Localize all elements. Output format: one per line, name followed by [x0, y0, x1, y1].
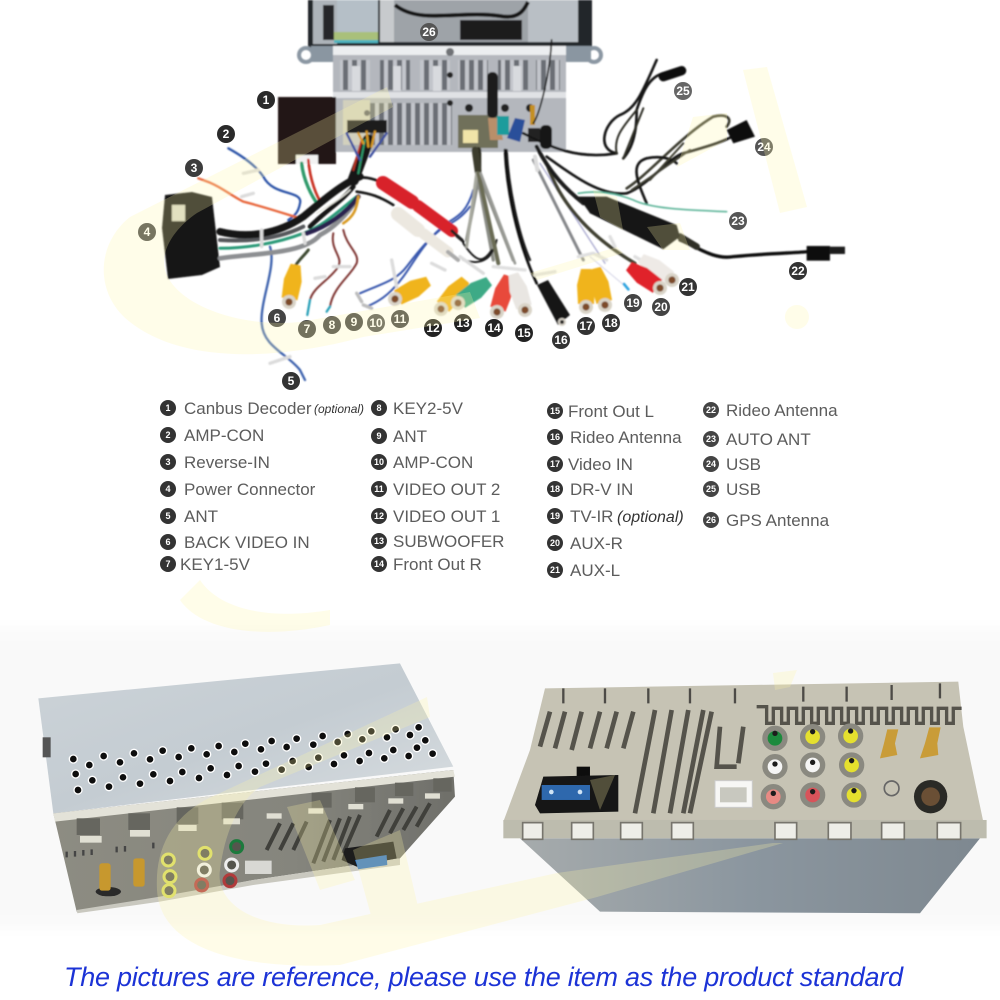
- item 19: TV-IR: [570, 507, 613, 526]
- photo: unit perspective view from above: [38, 663, 455, 913]
- callout 3: 3: [191, 161, 198, 175]
- item 12: 12: [374, 511, 384, 521]
- item 2: 2: [165, 430, 171, 440]
- RCA plug 21 white: [636, 251, 683, 291]
- top notches: [563, 683, 940, 703]
- connector blocks on chassis: [347, 72, 552, 149]
- item 21: 21: [550, 565, 560, 575]
- white multi-pin plug: [715, 781, 752, 807]
- item 11: 11: [374, 484, 384, 494]
- vent holes: [69, 723, 437, 794]
- item 10: 10: [374, 457, 384, 467]
- callout numbers on diagram: [138, 23, 807, 390]
- callout 23: [729, 212, 747, 230]
- item 9: [371, 427, 427, 446]
- callout 23: 23: [731, 214, 745, 228]
- callout 1: [257, 91, 275, 109]
- item 17: Video IN: [568, 455, 633, 474]
- panel tabs: [77, 778, 452, 835]
- callout 11: [391, 310, 409, 328]
- 3.5mm plug 16: [537, 280, 570, 326]
- underside: [520, 838, 980, 913]
- item 15: Front Out L: [568, 402, 654, 421]
- watermark lower letters: [180, 580, 797, 930]
- item 26: 26: [706, 515, 716, 525]
- item 14: Front Out R: [393, 555, 482, 574]
- item 3: 3: [165, 457, 171, 467]
- callout 10: 10: [369, 316, 383, 330]
- callout 2: 2: [223, 127, 230, 141]
- item 17: 17: [550, 459, 560, 469]
- item 1: (optional): [314, 402, 364, 416]
- item 18: DR-V IN: [570, 480, 633, 499]
- item 6: 6: [165, 537, 171, 547]
- item 24: [703, 455, 761, 474]
- callout 20: [652, 298, 670, 316]
- RCA plug 12 yellow: [430, 274, 472, 320]
- watermark upper C: [104, 87, 480, 354]
- item 3: Reverse-IN: [184, 453, 270, 472]
- small slots: [67, 843, 153, 857]
- callout 9: [345, 313, 363, 331]
- lower lip with tabs: [503, 820, 987, 838]
- callout 7: [298, 320, 316, 338]
- legend column 4: [703, 401, 838, 530]
- RCA plug 13 green: [447, 274, 494, 314]
- item 4: 4: [165, 484, 171, 494]
- photo: unit rear panel close up: [503, 682, 987, 913]
- right side bundles: [467, 40, 845, 289]
- item 22: Rideo Antenna: [726, 401, 838, 420]
- gold antenna sockets: [880, 727, 941, 758]
- callout 17: 17: [579, 319, 593, 333]
- left harness wires: [198, 132, 530, 380]
- legend: connector names: [160, 399, 838, 580]
- item 22: 22: [706, 405, 716, 415]
- callout 11: 11: [394, 312, 407, 326]
- multi-pin connector: [535, 767, 618, 813]
- callout 6: [268, 309, 286, 327]
- chassis: [333, 46, 566, 152]
- callout 26: [420, 23, 438, 41]
- rear plate: [503, 682, 983, 822]
- round socket: [884, 780, 947, 813]
- RCA plug 14 red: [486, 273, 517, 321]
- item 26: GPS Antenna: [726, 511, 830, 530]
- callout 14: [485, 319, 503, 337]
- callout 10: [367, 314, 385, 332]
- item 7: 7: [165, 559, 171, 569]
- legend column 1: [160, 399, 364, 574]
- item 10: AMP-CON: [393, 453, 473, 472]
- item 25: USB: [726, 480, 761, 499]
- item 20: 20: [550, 538, 560, 548]
- wire labels: [242, 170, 483, 363]
- callout 5: 5: [288, 374, 295, 388]
- item 16: 16: [550, 432, 560, 442]
- callout 8: [323, 316, 341, 334]
- rear panel: [53, 770, 455, 912]
- watermark: large translucent lettering: [104, 67, 809, 966]
- callout 15: 15: [517, 326, 531, 340]
- item 1: [160, 399, 364, 418]
- item 14: 14: [374, 559, 384, 569]
- RCA plug 15 white: [505, 271, 536, 319]
- panel highlights: [80, 793, 440, 843]
- item 18: 18: [550, 484, 560, 494]
- callout 24: 24: [757, 140, 771, 154]
- RCA plug 17 yellow: [577, 269, 595, 314]
- RCA plug 6 yellow: [279, 263, 304, 310]
- item 7: KEY1-5V: [180, 555, 251, 574]
- item 19: 19: [550, 511, 560, 521]
- power connector: [162, 192, 220, 279]
- callout 16: 16: [554, 333, 568, 347]
- item 11: VIDEO OUT 2: [393, 480, 500, 499]
- item 9: 9: [376, 431, 382, 441]
- callout 17: [577, 317, 595, 335]
- item 15: 15: [550, 406, 560, 416]
- top cover: [38, 663, 453, 813]
- callout 16: [552, 331, 570, 349]
- callout 14: 14: [487, 321, 501, 335]
- item 13: SUBWOOFER: [393, 532, 504, 551]
- item 23: 23: [706, 434, 716, 444]
- blue connector: [342, 842, 397, 867]
- watermark lower C: [157, 697, 783, 966]
- item 16: Rideo Antenna: [570, 428, 682, 447]
- item 5: ANT: [184, 507, 218, 526]
- RCA plug 20 red: [624, 259, 671, 299]
- legend column 2: [371, 399, 504, 574]
- callout 20: 20: [654, 300, 668, 314]
- item 24: 24: [706, 459, 716, 469]
- callout 8: 8: [329, 318, 336, 332]
- callout 3: [185, 159, 203, 177]
- item 9: ANT: [393, 427, 427, 446]
- callout 4: [138, 223, 156, 241]
- item 6: BACK VIDEO IN: [184, 533, 310, 552]
- callout 13: [454, 314, 472, 332]
- callout 26: 26: [422, 25, 436, 39]
- callout 12: [424, 319, 442, 337]
- item 23: AUTO ANT: [726, 430, 811, 449]
- item 13: 13: [374, 536, 384, 546]
- callout 13: 13: [456, 316, 470, 330]
- callout 6: 6: [274, 311, 281, 325]
- callout 4: 4: [144, 225, 151, 239]
- white plug: [245, 861, 272, 874]
- callout 21: [679, 278, 697, 296]
- callout 19: 19: [626, 296, 640, 310]
- panel lower lip: [77, 858, 400, 913]
- item 24: USB: [726, 455, 761, 474]
- callout 22: [789, 262, 807, 280]
- callout 18: 18: [604, 316, 618, 330]
- callout 21: 21: [681, 280, 695, 294]
- item 2: AMP-CON: [184, 426, 264, 445]
- callout 15: [515, 324, 533, 342]
- callout 1: 1: [263, 93, 270, 107]
- legend column 3: [547, 402, 684, 580]
- RCA socket grid: [162, 841, 243, 897]
- item 5: 5: [165, 511, 171, 521]
- item 21: [547, 561, 620, 580]
- callout 18: [602, 314, 620, 332]
- item 8: 8: [376, 403, 382, 413]
- gold antenna connectors: [96, 858, 145, 896]
- item 12: VIDEO OUT 1: [393, 507, 500, 526]
- item 1: 1: [165, 403, 171, 413]
- item 8: KEY2-5V: [393, 399, 464, 418]
- callout 2: [217, 125, 235, 143]
- RCA plug 18 yellow: [587, 266, 615, 314]
- RCA plug 11 yellow: [385, 273, 433, 310]
- watermark upper letters: [530, 67, 809, 329]
- RCA socket centres: [771, 728, 857, 796]
- callout 5: [282, 372, 300, 390]
- item 20: AUX-R: [570, 534, 623, 553]
- photo: head unit rear with wiring harness: [162, 0, 845, 380]
- item 19: (optional): [617, 509, 684, 526]
- callout 22: 22: [791, 264, 805, 278]
- item 25: 25: [706, 484, 716, 494]
- callout 25: 25: [676, 84, 690, 98]
- right comb fins: [757, 707, 962, 723]
- slotted fins: [267, 803, 430, 863]
- callout 24: [755, 138, 773, 156]
- caption: The pictures are reference, please use the item as the product standard: [64, 962, 904, 992]
- callout 12: 12: [426, 321, 440, 335]
- left slanted fins: [540, 710, 743, 813]
- item 19: [547, 507, 684, 526]
- callout 25: [674, 82, 692, 100]
- callout 19: [624, 294, 642, 312]
- item 21: AUX-L: [570, 561, 620, 580]
- callout 7: 7: [304, 322, 311, 336]
- red and white paired RCA plugs: [383, 183, 462, 260]
- callout 9: 9: [351, 315, 358, 329]
- item 25: [703, 480, 761, 499]
- item 1: Canbus Decoder: [184, 399, 312, 418]
- item 20: [547, 534, 623, 553]
- item 5: [160, 507, 218, 526]
- item 4: Power Connector: [184, 480, 316, 499]
- decoder box: [278, 97, 336, 164]
- RCA sockets: [763, 726, 864, 807]
- upper unit body: [299, 0, 601, 62]
